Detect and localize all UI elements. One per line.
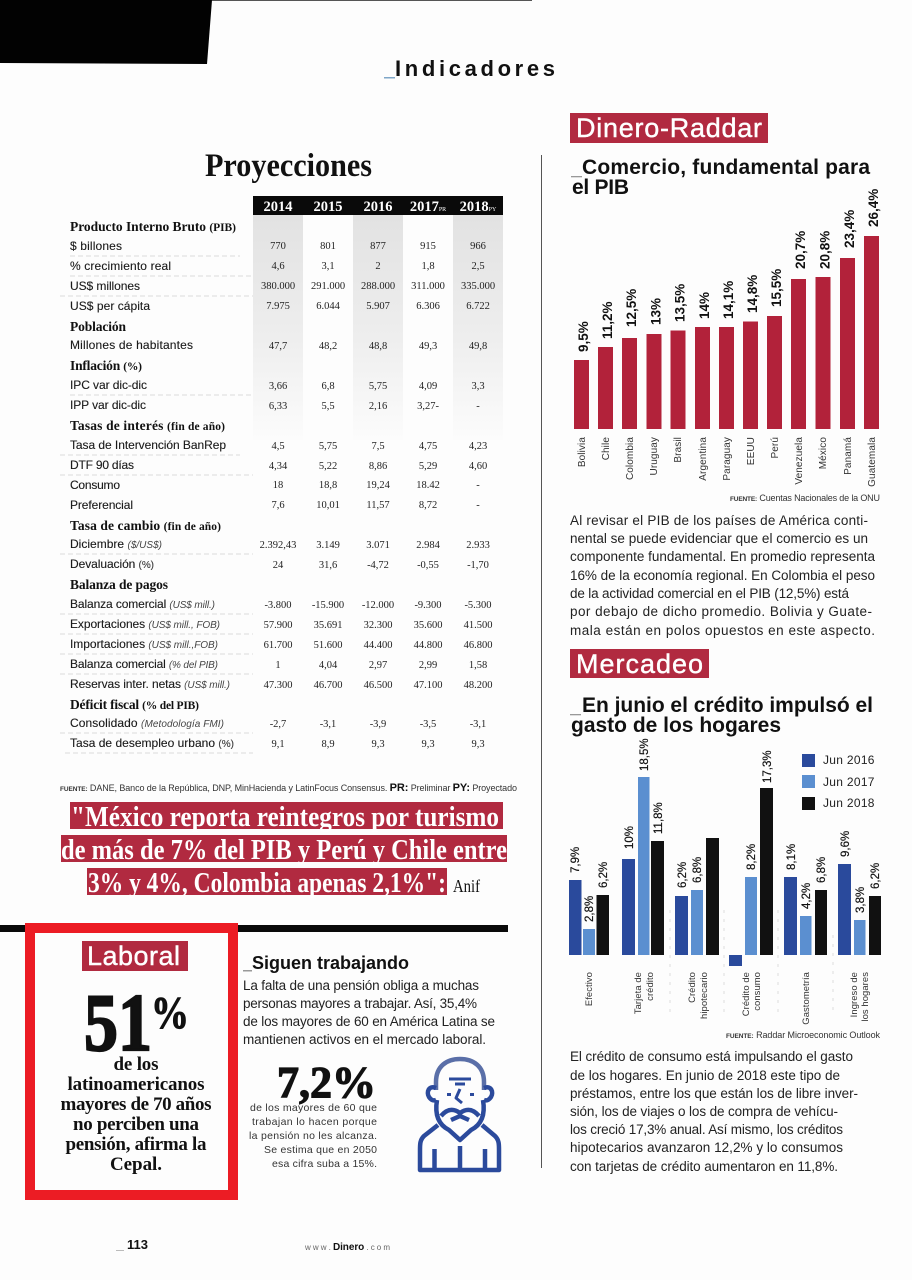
bar values: 14% xyxy=(697,292,712,319)
text: comercio body: 16% de la economía regional. En Colombia el peso xyxy=(570,568,875,583)
row: DTF 90 dias: 4,34 xyxy=(269,461,288,472)
row: Tasa de Intervencion BanRep: Tasa de Intervención BanRep xyxy=(70,438,226,452)
table header: 2018PY xyxy=(460,199,497,215)
bar values: 20,8% xyxy=(818,231,832,269)
heading: Comercio xyxy=(571,156,870,199)
category labels xyxy=(583,971,870,1025)
row: Tasa de Intervencion BanRep: 7,5 xyxy=(371,441,385,452)
row: Reservas inter. netas: 46.700 xyxy=(314,680,342,691)
row: Preferencial: 10,01 xyxy=(316,500,340,511)
row: Devaluacion xyxy=(70,557,489,571)
series Jun 2018 bars xyxy=(596,788,881,955)
site url: w w w . Dinero . c o m xyxy=(304,1242,390,1253)
row: Balanza comercial PIB: 4,04 xyxy=(319,660,338,671)
bars xyxy=(574,236,879,429)
row: Balanza comercial US$: -15.900 xyxy=(312,600,344,611)
row: Reservas inter. netas: 46.500 xyxy=(364,680,392,691)
row: Consumo: 18,8 xyxy=(319,480,337,491)
table header: 2015 xyxy=(314,199,342,215)
category labels: Efectivo xyxy=(583,972,594,1006)
text: mercadeo body: sión, los de viajes o los de compra de vehícu- xyxy=(570,1104,838,1119)
bar values: 13,5% xyxy=(672,284,688,322)
country labels: México xyxy=(818,437,829,469)
row: IPP var dic-dic: - xyxy=(476,401,480,412)
row: % crecimiento real: 3,1 xyxy=(321,261,335,272)
row: US$ millones: 311.000 xyxy=(411,281,445,292)
section: Inflacion: Inflación (%) xyxy=(70,358,142,373)
section title: Indicadores: Indicadores xyxy=(395,56,555,81)
bar values: 6,2% xyxy=(870,863,882,889)
table header xyxy=(253,196,503,215)
row: US$ millones: 291.000 xyxy=(311,281,345,292)
row: Consumo: Consumo xyxy=(70,478,120,492)
row: US$ per capita: US$ per cápita xyxy=(70,299,150,313)
row: Preferencial: 8,72 xyxy=(419,500,437,511)
bar values: 23,4% xyxy=(842,210,857,248)
row: Millones de habitantes: Millones de habitantes xyxy=(70,338,193,352)
bar values: 15,5% xyxy=(769,269,784,307)
row: IPC var dic-dic: 4,09 xyxy=(419,381,437,392)
bar values: 12,5% xyxy=(624,289,639,327)
row: Consolidado xyxy=(70,716,486,730)
row: Exportaciones xyxy=(70,617,492,631)
quote callout: 3% y 4%, Colombia apenas 2,1%": xyxy=(88,868,446,899)
heading: En junio el credito xyxy=(570,694,873,737)
bar values xyxy=(570,738,882,922)
row: Consolidado: Consolidado (Metodología FMI) xyxy=(70,716,224,730)
row: US$ per capita: 5.907 xyxy=(366,301,390,312)
text: comercio body: Al revisar el PIB de los países de América conti- xyxy=(570,513,868,528)
row: Exportaciones: 57.900 xyxy=(264,620,292,631)
row: Consumo: 19,24 xyxy=(366,480,391,491)
row: Consolidado: -3,1 xyxy=(470,719,486,730)
table header: 2017PR xyxy=(410,199,446,215)
row: Preferencial: 7,6 xyxy=(271,500,285,511)
row: Consumo: 18.42 xyxy=(416,480,440,491)
row: Exportaciones: 32.300 xyxy=(364,620,392,631)
quote callout xyxy=(61,802,507,899)
row: IPC var dic-dic: 6,8 xyxy=(321,381,335,392)
text: mercadeo body: los creció 17,3% anual. Así mismo, los créditos xyxy=(570,1122,843,1137)
row: Exportaciones: 35.600 xyxy=(414,620,442,631)
series Jun 2016 bars xyxy=(569,859,851,966)
text: comercio body: de la actividad comercial en el PIB (12,5%) está xyxy=(570,586,849,601)
bar values: 2,8% xyxy=(584,896,596,922)
country labels: Chile xyxy=(601,437,612,460)
row: Devaluacion: -0,55 xyxy=(417,560,439,571)
bar values: 8,1% xyxy=(786,844,798,870)
text: comercio body xyxy=(570,513,875,638)
bar values: 11,8% xyxy=(653,802,665,834)
stat caption: mayores de 70 años xyxy=(60,1094,212,1115)
text: mercadeo body: El crédito de consumo está impulsando el gasto xyxy=(570,1049,853,1064)
panel: Laboral highlight xyxy=(30,928,233,1195)
row: US$ per capita xyxy=(70,299,490,313)
row: Tasa de desempleo urbano: 9,3 xyxy=(471,739,485,750)
legend xyxy=(802,753,875,810)
row: Balanza comercial US$: -12.000 xyxy=(362,600,394,611)
row: Balanza comercial PIB: 2,97 xyxy=(369,660,387,671)
stat: 51%: % xyxy=(151,987,189,1038)
row: Tasa de Intervencion BanRep: 4,75 xyxy=(419,441,437,452)
row: IPP var dic-dic: 5,5 xyxy=(321,401,335,412)
row: Exportaciones: 35.691 xyxy=(314,620,342,631)
stat: 51%: 51 xyxy=(84,977,152,1068)
row: US$ per capita: 6.722 xyxy=(466,301,490,312)
category labels: Tarjeta de xyxy=(632,972,643,1014)
row: Tasa de desempleo urbano: 8,9 xyxy=(321,739,335,750)
category labels: los hogares xyxy=(859,972,870,1022)
row: Importaciones: 44.800 xyxy=(414,640,442,651)
row: Diciembre: Diciembre ($/US$) xyxy=(70,537,162,551)
country labels: Bolivia xyxy=(577,437,588,467)
row: Consolidado: -2,7 xyxy=(270,719,286,730)
row: IPC var dic-dic: 3,66 xyxy=(269,381,287,392)
stat caption: Cepal. xyxy=(110,1154,162,1175)
text: mercadeo body: de los hogares. En junio de 2018 este tipo de xyxy=(570,1068,840,1083)
text: mercadeo body: préstamos, entre los que están los de libre inver- xyxy=(570,1086,858,1101)
row: Reservas inter. netas xyxy=(70,677,492,691)
chart source: Raddar: FUENTE: Raddar Microeconomic Outlook xyxy=(726,1030,880,1040)
row: DTF 90 dias xyxy=(70,458,487,472)
row: IPC var dic-dic: 5,75 xyxy=(369,381,387,392)
row: IPP var dic-dic: 3,27- xyxy=(417,401,439,412)
country labels: Colombia xyxy=(625,437,636,480)
row: Diciembre: 2.984 xyxy=(416,540,441,551)
bar values: 14,8% xyxy=(745,275,760,313)
bar values: 14,1% xyxy=(721,281,736,319)
bar values: 11,2% xyxy=(600,301,615,339)
bar values: 6,2% xyxy=(598,862,610,888)
stat caption: pensión, afirma la xyxy=(66,1134,207,1155)
quote callout: "México reporta reintegros por turismo xyxy=(71,802,499,833)
row: IPC var dic-dic: IPC var dic-dic xyxy=(70,378,147,392)
table: proyecciones xyxy=(60,196,503,753)
stat caption: no perciben una xyxy=(73,1114,200,1135)
row: Tasa de Intervencion BanRep: 4,5 xyxy=(271,441,285,452)
text: mercadeo body: con tarjetas de crédito aumentaron en 11,8%. xyxy=(570,1159,838,1174)
row: $ billones: 966 xyxy=(470,241,486,252)
row: Importaciones: 61.700 xyxy=(264,640,292,651)
stat caption: latinoamericanos xyxy=(68,1074,204,1095)
row: $ billones: 915 xyxy=(420,241,436,252)
row: Preferencial: 11,57 xyxy=(366,500,390,511)
country labels: Perú xyxy=(770,437,781,459)
row: DTF 90 dias: 5,29 xyxy=(419,461,437,472)
icon: bearded older man xyxy=(420,1059,499,1170)
column divider xyxy=(541,155,542,1168)
row: Balanza comercial US$: Balanza comercial (US$ mill.) xyxy=(70,597,215,611)
text: comercio body: componente fundamental. En promedio representa xyxy=(570,549,875,564)
row: Reservas inter. netas: 47.300 xyxy=(264,680,292,691)
row: % crecimiento real: 2 xyxy=(375,261,381,272)
row: Reservas inter. netas: 48.200 xyxy=(464,680,492,691)
legend: Jun 2016 xyxy=(823,753,875,767)
row: US$ millones: 288.000 xyxy=(361,281,395,292)
row: US$ millones: 380.000 xyxy=(261,281,295,292)
row: Tasa de desempleo urbano: 9,3 xyxy=(421,739,435,750)
row: Tasa de desempleo urbano: 9,1 xyxy=(271,739,285,750)
bar values: 6,8% xyxy=(816,857,828,883)
category labels: crédito xyxy=(644,972,655,1001)
row: DTF 90 dias: 4,60 xyxy=(469,461,487,472)
text: mercadeo body xyxy=(570,1049,858,1174)
section: Tasas de interes: Tasas de interés (fin de año) xyxy=(70,418,225,433)
stat: 7,2%: 7,2% xyxy=(277,1058,376,1107)
badge: Mercadeo: Mercadeo xyxy=(576,649,703,679)
text: 7,2% caption: esa cifra suba a 15%. xyxy=(272,1158,377,1170)
category labels: consumo xyxy=(751,972,762,1011)
category labels: hipotecario xyxy=(698,972,709,1019)
row: US$ per capita: 6.044 xyxy=(316,301,341,312)
section: Producto Interno Bruto: Producto Interno Bruto (PIB) xyxy=(70,219,236,234)
legend: Jun 2018 xyxy=(823,796,875,810)
row: DTF 90 dias: DTF 90 días xyxy=(70,458,134,472)
bar values: 20,7% xyxy=(793,231,808,269)
row: Balanza comercial PIB: 1 xyxy=(275,660,281,671)
country labels: Guatemala xyxy=(867,437,878,487)
text: 7,2% caption xyxy=(249,1102,377,1170)
stat caption: de los xyxy=(114,1054,158,1075)
bar values: 13% xyxy=(648,298,664,325)
row: Diciembre xyxy=(70,537,490,551)
row: DTF 90 dias: 5,22 xyxy=(319,461,337,472)
row: DTF 90 dias: 8,86 xyxy=(369,461,387,472)
row: % crecimiento real: 4,6 xyxy=(271,261,285,272)
text: comercio body: nental se puede evidenciar que el comercio es un xyxy=(570,531,868,546)
row: Preferencial xyxy=(70,498,480,512)
row: Devaluacion: Devaluación (%) xyxy=(70,557,154,571)
country labels: Panamá xyxy=(843,437,854,475)
row: Importaciones: Importaciones (US$ mill.,FOB) xyxy=(70,637,218,651)
row: Diciembre: 2.933 xyxy=(466,540,490,551)
row: Millones de habitantes: 48,2 xyxy=(319,341,337,352)
row: Devaluacion: -4,72 xyxy=(367,560,389,571)
heading: En junio el credito: En junio el crédito impulsó el xyxy=(582,694,873,717)
badge: Dinero-Raddar: Dinero-Raddar xyxy=(576,113,762,143)
row: % crecimiento real: 2,5 xyxy=(471,261,485,272)
page number: 113 xyxy=(127,1237,148,1252)
row: Balanza comercial PIB: 2,99 xyxy=(419,660,437,671)
category labels: Ingreso de xyxy=(848,972,859,1017)
row: IPP var dic-dic: IPP var dic-dic xyxy=(70,398,146,412)
text: 7,2% caption: de los mayores de 60 que xyxy=(250,1102,377,1114)
country labels: Paraguay xyxy=(722,437,733,481)
text: 7,2% caption: Se estima que en 2050 xyxy=(264,1144,377,1156)
row: Diciembre: 2.392,43 xyxy=(260,540,296,551)
row: Tasa de Intervencion BanRep: 5,75 xyxy=(319,441,337,452)
bar values: 3,8% xyxy=(855,887,867,913)
row: US$ per capita: 6.306 xyxy=(416,301,440,312)
row: IPP var dic-dic: 2,16 xyxy=(369,401,387,412)
row: Balanza comercial US$: -9.300 xyxy=(414,600,442,611)
row: Tasa de desempleo urbano xyxy=(70,736,485,750)
row: Devaluacion: 24 xyxy=(273,560,284,571)
row: Consolidado: -3,5 xyxy=(420,719,436,730)
row: Millones de habitantes: 49,8 xyxy=(469,341,487,352)
section: Balanza de pagos: Balanza de pagos xyxy=(70,577,168,592)
quote callout: Anif xyxy=(453,876,480,896)
section: Deficit fiscal: Déficit fiscal (% del PIB) xyxy=(70,697,199,712)
row: US$ millones: US$ millones xyxy=(70,279,140,293)
country labels: Venezuela xyxy=(794,437,805,485)
bar values xyxy=(576,189,881,352)
row: Reservas inter. netas: Reservas inter. netas (US$ mill.) xyxy=(70,677,230,691)
country labels xyxy=(577,437,878,487)
row: % crecimiento real xyxy=(70,259,485,273)
quote callout: de más de 7% del PIB y Perú y Chile entre xyxy=(61,835,507,866)
badge: Laboral: Laboral xyxy=(87,941,180,971)
bar values: 17,3% xyxy=(762,750,774,783)
heading: Proyecciones: Proyecciones xyxy=(205,148,372,184)
text: comercio body: por debajo de dicho promedio. Bolivia y Guate- xyxy=(570,604,872,619)
row: $ billones: 877 xyxy=(370,241,386,252)
row: Millones de habitantes: 49,3 xyxy=(419,341,437,352)
heading: Siguen trabajando: Siguen trabajando xyxy=(252,953,409,973)
row: Importaciones: 51.600 xyxy=(314,640,342,651)
table header: 2016 xyxy=(364,199,392,215)
row: Preferencial: - xyxy=(476,500,480,511)
row: Reservas inter. netas: 47.100 xyxy=(414,680,442,691)
row: US$ millones: 335.000 xyxy=(461,281,495,292)
category labels: Crédito xyxy=(686,972,697,1003)
row: Exportaciones: Exportaciones (US$ mill., FOB) xyxy=(70,617,220,631)
category labels: Crédito de xyxy=(740,972,751,1016)
text: mercadeo body: hipotecarios avanzaron 12,2% y lo consumos xyxy=(570,1140,843,1155)
text: 7,2% caption: la pensión no les alcanza. xyxy=(249,1130,377,1142)
row: Tasa de Intervencion BanRep: 4,23 xyxy=(469,441,487,452)
bar values: 6,8% xyxy=(692,857,704,883)
text: Siguen trabajando body: La falta de una pensión obliga a muchas xyxy=(243,978,479,993)
bar values: 9,5% xyxy=(576,321,591,352)
row: Balanza comercial US$ xyxy=(70,597,492,611)
row: Importaciones: 44.400 xyxy=(364,640,392,651)
row: Devaluacion: 31,6 xyxy=(319,560,337,571)
row: Millones de habitantes xyxy=(70,338,487,352)
bar values: 18,5% xyxy=(639,738,651,771)
row: Balanza comercial PIB: 1,58 xyxy=(469,660,487,671)
bar values: 9,6% xyxy=(840,831,852,857)
row: Consumo: - xyxy=(476,480,480,491)
section: Poblacion: Población xyxy=(70,319,126,334)
black divider rule xyxy=(0,925,508,932)
row: Diciembre: 3.071 xyxy=(366,540,390,551)
row: $ billones: $ billones xyxy=(70,239,122,253)
row: Importaciones: 46.800 xyxy=(464,640,492,651)
black corner block xyxy=(0,0,532,64)
bar values: 6,2% xyxy=(677,862,689,888)
legend: Jun 2017 xyxy=(823,775,875,789)
country labels: EEUU xyxy=(746,437,757,465)
text: Siguen trabajando body xyxy=(243,978,495,1047)
section: Tasa de cambio: Tasa de cambio (fin de año) xyxy=(70,518,221,533)
row: Consolidado: -3,1 xyxy=(320,719,336,730)
row: US$ millones xyxy=(70,279,495,293)
text: 7,2% caption: trabajan lo hacen porque xyxy=(252,1116,377,1128)
bar values: 4,2% xyxy=(801,883,813,909)
text: Siguen trabajando body: de los mayores de 60 en América Latina se xyxy=(243,1014,495,1029)
chart source: ONU: FUENTE: Cuentas Nacionales de la ONU xyxy=(730,493,880,503)
row: US$ per capita: 7.975 xyxy=(266,301,290,312)
bar values: 26,4% xyxy=(866,189,881,227)
heading: Comercio: el PIB xyxy=(572,176,629,199)
row: % crecimiento real: 1,8 xyxy=(421,261,435,272)
text: Siguen trabajando body: personas mayores a trabajar. Así, 35,4% xyxy=(243,996,477,1011)
row: Balanza comercial US$: -5.300 xyxy=(464,600,492,611)
row: Consumo xyxy=(70,478,480,492)
row: % crecimiento real: % crecimiento real xyxy=(70,259,171,273)
row: Tasa de Intervencion BanRep xyxy=(70,438,487,452)
row: Consolidado: -3,9 xyxy=(370,719,386,730)
row: IPP var dic-dic: 6,33 xyxy=(269,401,287,412)
country labels: Argentina xyxy=(698,437,709,481)
row: Balanza comercial US$: -3.800 xyxy=(264,600,292,611)
row: Devaluacion: -1,70 xyxy=(467,560,489,571)
country labels: Brasil xyxy=(673,437,684,463)
row: $ billones: 801 xyxy=(320,241,336,252)
row: IPP var dic-dic xyxy=(70,398,480,412)
row: Consumo: 18 xyxy=(273,480,283,491)
row: Balanza comercial PIB xyxy=(70,657,487,671)
row: IPC var dic-dic: 3,3 xyxy=(471,381,485,392)
row: Tasa de desempleo urbano: Tasa de desempleo urbano (%) xyxy=(70,736,234,750)
stat caption xyxy=(60,1054,212,1175)
text: comercio body: mala están en polos opuestos en este aspecto. xyxy=(570,623,875,638)
row: Exportaciones: 41.500 xyxy=(464,620,492,631)
row: Balanza comercial PIB: Balanza comercial (% del PIB) xyxy=(70,657,218,671)
series Jun 2017 bars xyxy=(583,777,866,955)
country labels: Uruguay xyxy=(649,437,660,476)
row: Preferencial: Preferencial xyxy=(70,498,133,512)
bar values: 8,2% xyxy=(746,844,758,870)
row: Importaciones xyxy=(70,637,492,651)
bar values: 10% xyxy=(624,826,636,849)
category labels: Gastometría xyxy=(800,971,811,1025)
row: $ billones: 770 xyxy=(270,241,286,252)
row: $ billones xyxy=(70,239,486,253)
row: Tasa de desempleo urbano: 9,3 xyxy=(371,739,385,750)
page number xyxy=(116,1237,148,1252)
text: Siguen trabajando body: mantienen activos en el mercado laboral. xyxy=(243,1032,486,1047)
row: Millones de habitantes: 47,7 xyxy=(269,341,287,352)
bar chart: mercadeo xyxy=(569,738,882,1025)
heading: Comercio: Comercio, fundamental para xyxy=(582,156,870,179)
bar chart: comercio xyxy=(574,189,881,487)
row: Millones de habitantes: 48,8 xyxy=(369,341,387,352)
bar values: 7,9% xyxy=(570,847,582,873)
heading: En junio el credito: gasto de los hogares xyxy=(571,714,781,737)
table header: 2014 xyxy=(264,199,292,215)
table source note: FUENTE: DANE, Banco de la República, DNP, MinHacienda y LatinFocus Consensus. PR: Preliminar PY: Proyectado xyxy=(60,782,517,794)
row: IPC var dic-dic xyxy=(70,378,485,392)
row: Diciembre: 3.149 xyxy=(316,540,340,551)
